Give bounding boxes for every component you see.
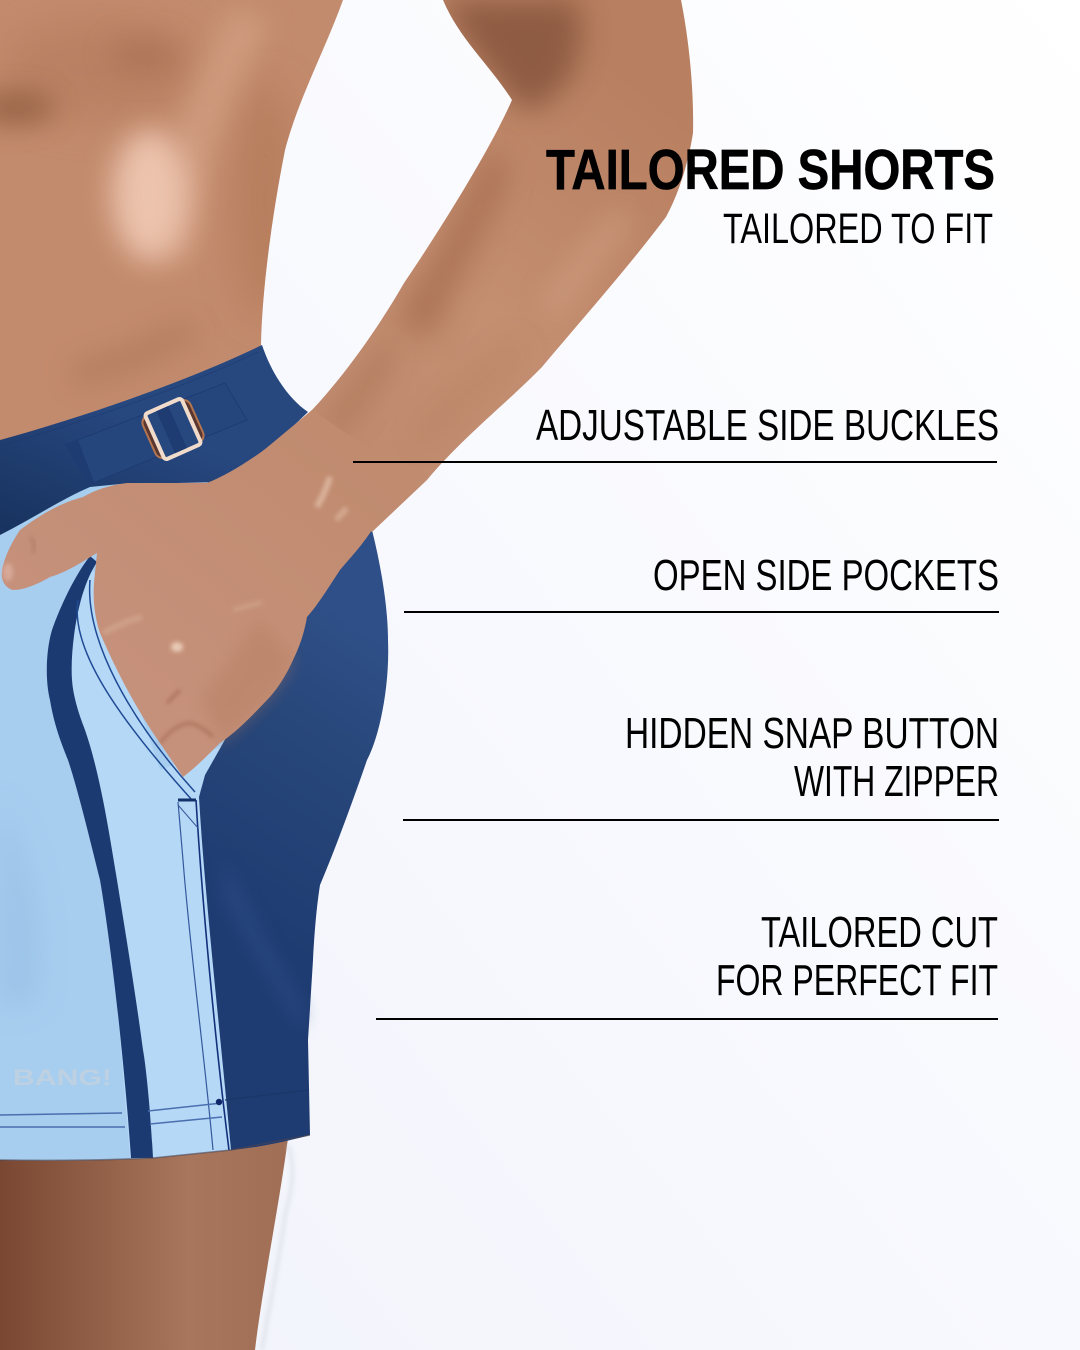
feature: hidden snap button with zipper: WITH ZIPPER — [794, 757, 999, 806]
fabric folds — [222, 860, 305, 1030]
torso — [0, 0, 345, 460]
shorts — [0, 345, 388, 1161]
navy side panel — [199, 520, 388, 1150]
feature: tailored cut for perfect fit — [376, 908, 998, 1020]
navy stripe — [47, 556, 153, 1158]
photo: model wearing shorts — [0, 0, 710, 1350]
title: TAILORED SHORTS — [546, 138, 995, 202]
pocket piping — [0, 580, 308, 1150]
inner light side panel — [60, 560, 231, 1158]
belt strap — [65, 383, 247, 483]
feature: tailored cut for perfect fit: TAILORED CUT — [761, 908, 998, 957]
hand — [2, 410, 400, 777]
feature: hidden snap button with zipper — [403, 709, 999, 821]
buckle — [139, 396, 207, 462]
upper leg — [0, 1138, 292, 1350]
subtitle: TAILORED TO FIT — [723, 205, 993, 253]
front light blue panel — [0, 470, 240, 1161]
hem shadow — [0, 1135, 310, 1160]
logo: BANG! — [13, 1065, 112, 1090]
forearm — [264, 0, 694, 532]
waistband — [0, 345, 308, 535]
